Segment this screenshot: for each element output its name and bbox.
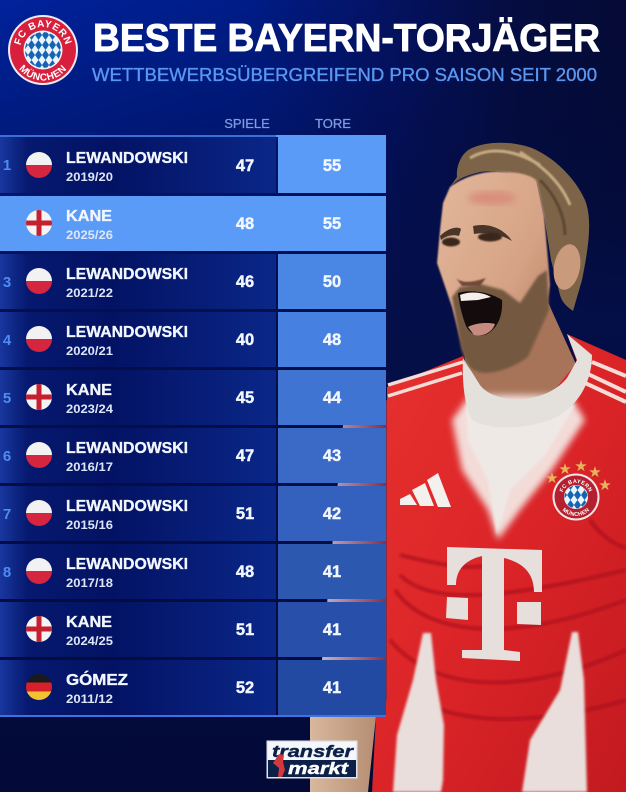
- row 4: 4: [3, 332, 12, 349]
- jersey crest: MÜNCHEN: [562, 508, 590, 516]
- row 3: LEWANDOWSKI: [66, 266, 188, 283]
- row 7: 2015/16: [66, 518, 113, 532]
- nose shadow: [456, 278, 486, 286]
- row 1: 2019/20: [66, 170, 113, 184]
- row 1: [0, 137, 386, 193]
- row 3: [0, 254, 386, 309]
- row 10: 41: [323, 679, 341, 697]
- five stars: ★: [598, 477, 612, 494]
- tongue: [468, 323, 495, 336]
- five stars: ★: [588, 464, 602, 481]
- row 9: [0, 602, 386, 657]
- row 6: 43: [323, 447, 341, 465]
- row 4: 48: [323, 331, 341, 349]
- row 5: [0, 370, 386, 425]
- hair highlights: [470, 151, 570, 235]
- logo: FC Bayern crest: [8, 15, 78, 85]
- row 10: 52: [236, 679, 254, 697]
- lower left stripe: [393, 633, 444, 792]
- row 4: 40: [236, 331, 254, 349]
- eyebrows: [440, 225, 512, 241]
- row 3: 2021/22: [66, 286, 113, 300]
- row 6: 47: [236, 447, 254, 465]
- forehead flush: [468, 191, 516, 205]
- row 10: 2011/12: [66, 692, 113, 706]
- mouth: [458, 291, 502, 336]
- player photo: Harry Kane: [310, 142, 626, 792]
- row 1: LEWANDOWSKI: [66, 150, 188, 167]
- row 9: 2024/25: [66, 634, 113, 648]
- left arm: [310, 716, 376, 792]
- row 7: LEWANDOWSKI: [66, 498, 188, 515]
- row 8: 48: [236, 563, 254, 581]
- row 7: 42: [323, 505, 341, 523]
- sleeve stripes left: [388, 362, 463, 396]
- jersey crest: [552, 474, 600, 520]
- jersey body: [372, 334, 626, 792]
- five stars: ★: [545, 470, 559, 487]
- row 8: 8: [3, 564, 11, 581]
- row 4: [0, 312, 386, 367]
- column headers: [224, 116, 351, 131]
- row 7: 7: [3, 506, 11, 523]
- logo: transfermarkt: [266, 740, 358, 778]
- neck: [463, 300, 590, 410]
- row 7: 51: [236, 505, 254, 523]
- row 5: 5: [3, 390, 11, 407]
- jersey folds: [390, 520, 626, 719]
- logo: transfermarkt: transfer: [272, 742, 355, 761]
- beard: [452, 270, 549, 373]
- row 2: 48: [236, 215, 254, 233]
- row 6: [0, 428, 386, 483]
- row 4: LEWANDOWSKI: [66, 324, 188, 341]
- row 9: KANE: [66, 614, 112, 631]
- sleeve behind table: [320, 400, 387, 716]
- row 5: 2023/24: [66, 402, 113, 416]
- row 5: 45: [236, 389, 254, 407]
- row 7: [0, 486, 386, 541]
- row 6: LEWANDOWSKI: [66, 440, 188, 457]
- logo: FC Bayern crest: FC BAYERN: [14, 20, 72, 45]
- column headers: SPIELE: [224, 116, 270, 131]
- ear: [550, 242, 584, 292]
- collar: [463, 334, 592, 428]
- row 8: LEWANDOWSKI: [66, 556, 188, 573]
- row 6: 6: [3, 448, 11, 465]
- logo: FC Bayern crest: MÜNCHEN: [19, 64, 66, 81]
- row 2: 55: [323, 215, 341, 233]
- row 1: 47: [236, 157, 254, 175]
- row 9: 51: [236, 621, 254, 639]
- T logo: [446, 547, 542, 661]
- row 4: 2020/21: [66, 344, 113, 358]
- row 10: GÓMEZ: [66, 670, 128, 689]
- hair: [450, 143, 589, 311]
- row 2: 2025/26: [66, 228, 113, 242]
- ranking table: [0, 135, 386, 717]
- row 3: 46: [236, 273, 254, 291]
- row 1: 55: [323, 157, 341, 175]
- adidas logo: [400, 473, 451, 507]
- row 6: 2016/17: [66, 460, 113, 474]
- column headers: TORE: [315, 116, 351, 131]
- teeth: [460, 293, 491, 301]
- row 3: 3: [3, 274, 11, 291]
- five stars: [545, 458, 612, 494]
- row 5: KANE: [66, 382, 112, 399]
- five stars: ★: [558, 461, 572, 478]
- row 5: 44: [323, 389, 342, 407]
- five stars: ★: [574, 458, 588, 475]
- row 2: [0, 196, 386, 251]
- eyes: [442, 232, 502, 246]
- row 3: 50: [323, 273, 341, 291]
- jersey crest: FC BAYERN: [559, 479, 592, 492]
- sleeve stripes right: [583, 362, 626, 402]
- row 8: 2017/18: [66, 576, 113, 590]
- row 10: [0, 660, 386, 716]
- logo: transfermarkt: markt: [288, 759, 350, 778]
- chest white fade: [452, 395, 585, 540]
- face: [437, 172, 550, 372]
- subtitle: WETTBEWERBSÜBERGREIFEND PRO SAISON SEIT 2000: [92, 64, 597, 85]
- title: BESTE BAYERN-TORJÄGER: [93, 17, 600, 60]
- row 2: KANE: [66, 208, 112, 225]
- row 8: 41: [323, 563, 341, 581]
- row 8: [0, 544, 386, 599]
- row 9: 41: [323, 621, 341, 639]
- row 1: 1: [3, 157, 11, 174]
- lower right stripe: [522, 632, 587, 792]
- logo figure: [273, 754, 285, 777]
